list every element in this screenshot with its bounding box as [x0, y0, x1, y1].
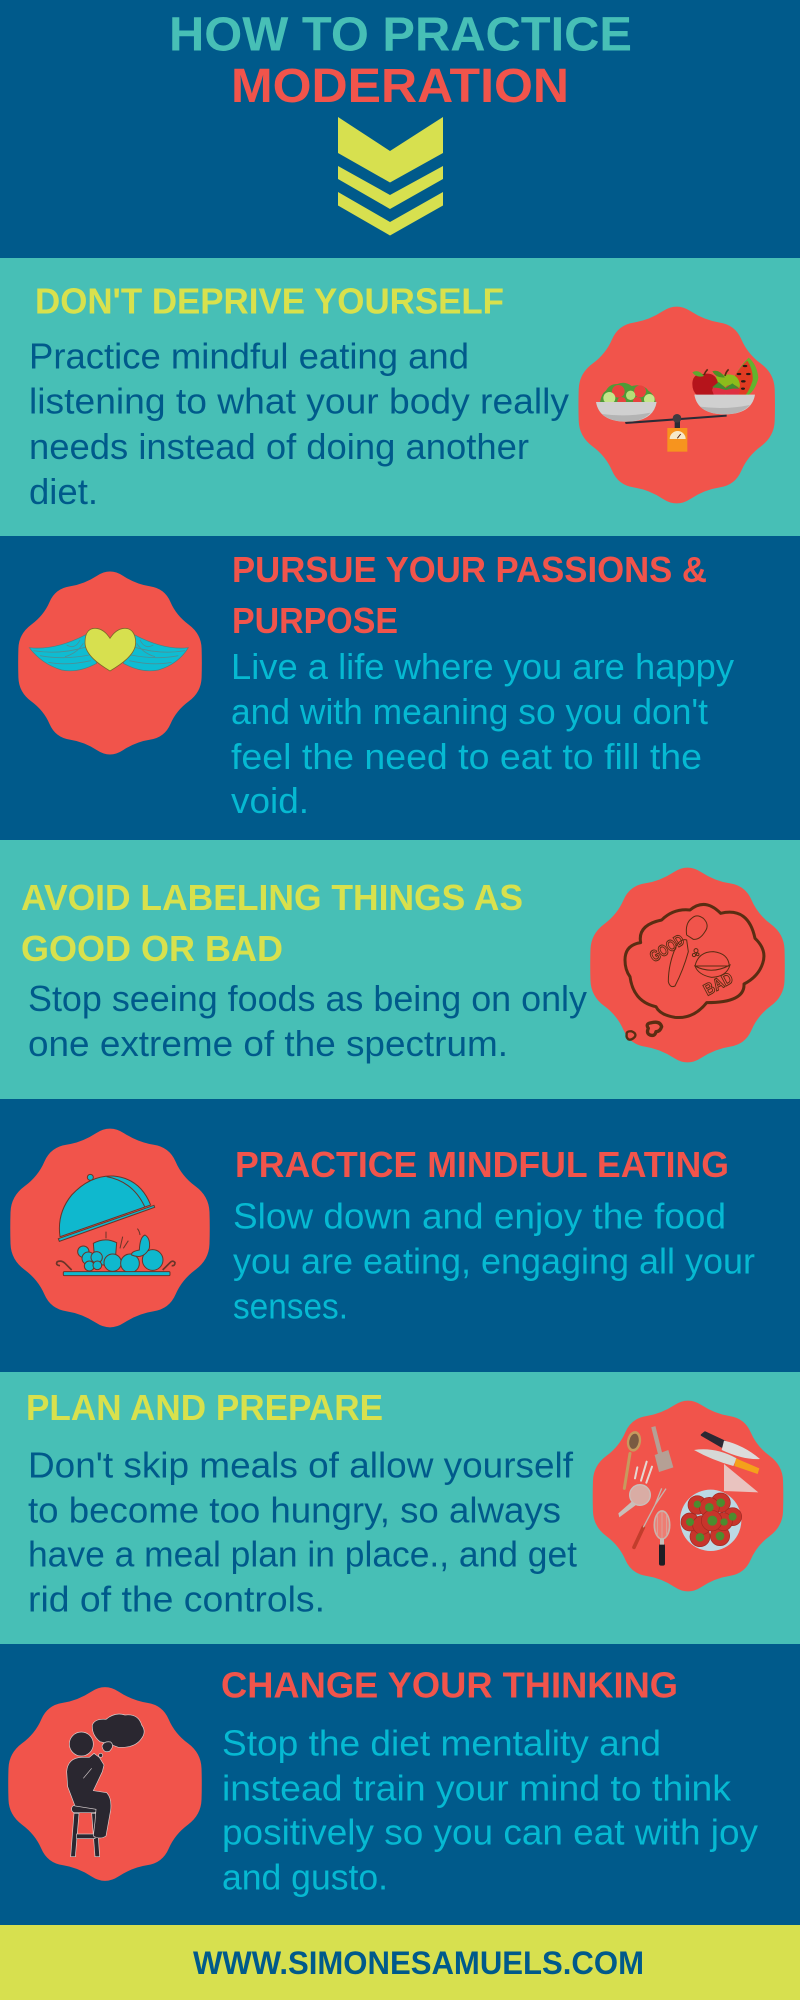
heading: PLAN AND PREPARE [26, 1387, 383, 1428]
heading: DON'T DEPRIVE YOURSELF [35, 280, 504, 322]
text block [28, 1444, 577, 1620]
heading [232, 549, 707, 641]
text block: to become too hungry, so always [28, 1490, 561, 1530]
text block [29, 336, 569, 512]
text block: Live a life where you are happy [231, 646, 734, 687]
text block: one extreme of the spectrum. [28, 1023, 508, 1064]
icon: thought bubble good and bad food: GOOD [647, 932, 688, 966]
heading: PRACTICE MINDFUL EATING [235, 1144, 729, 1185]
heading: CHANGE YOUR THINKING [221, 1664, 678, 1706]
title [169, 8, 632, 113]
text block: void. [231, 780, 309, 821]
panel: header [0, 0, 800, 258]
title: MODERATION [231, 60, 569, 113]
icon: heart with wings [18, 572, 202, 754]
text block: Stop seeing foods as being on only [28, 978, 587, 1019]
heading: PURSUE YOUR PASSIONS & [232, 549, 707, 590]
text block: Slow down and enjoy the food [233, 1196, 726, 1236]
icon: thought bubble good and bad food: BAD [700, 968, 736, 1000]
icon: balance scale with salad and fruit [578, 307, 775, 503]
text block: listening to what your body really [29, 380, 569, 422]
icon: serving cloche with vegetables [10, 1129, 210, 1327]
panel: change your thinking [0, 1644, 800, 1925]
text block: needs instead of doing another [29, 426, 529, 467]
text block: Stop the diet mentality and [222, 1722, 661, 1764]
panel: pursue your passions and purpose [0, 536, 800, 840]
text block: and with meaning so you don't [231, 691, 708, 732]
text block [231, 646, 734, 821]
icon: person thinking on stool [8, 1687, 202, 1881]
text block: you are eating, engaging all your [233, 1240, 755, 1282]
icon: triple chevron arrow [338, 117, 443, 236]
text block: senses. [233, 1286, 348, 1326]
icon: kitchen utensils and tomatoes [593, 1401, 783, 1591]
heading: GOOD OR BAD [21, 928, 283, 969]
text block: Don't skip meals of allow yourself [28, 1444, 574, 1486]
heading: AVOID LABELING THINGS AS [21, 877, 523, 918]
footer banner [0, 1925, 800, 2000]
text block [28, 978, 587, 1064]
text block [222, 1722, 758, 1898]
text block: Practice mindful eating and [29, 336, 469, 376]
panel: practice mindful eating [0, 1099, 800, 1372]
heading [21, 877, 523, 969]
text block: feel the need to eat to fill the [231, 736, 702, 777]
text block: diet. [29, 471, 98, 512]
text block: instead train your mind to think [222, 1768, 732, 1808]
website url: WWW.SIMONESAMUELS.COM [193, 1945, 644, 1981]
panel: plan and prepare [0, 1372, 800, 1644]
panel: avoid labeling things [0, 840, 800, 1099]
text block: and gusto. [222, 1856, 388, 1898]
title: HOW TO PRACTICE [169, 8, 632, 62]
text block: positively so you can eat with joy [222, 1812, 758, 1852]
panel: don't deprive yourself [0, 258, 800, 536]
icon: thought bubble good and bad food [590, 868, 785, 1062]
text block: have a meal plan in place., and get [28, 1534, 577, 1574]
text block [233, 1196, 755, 1326]
heading: PURPOSE [232, 600, 398, 641]
text block: rid of the controls. [28, 1578, 325, 1620]
